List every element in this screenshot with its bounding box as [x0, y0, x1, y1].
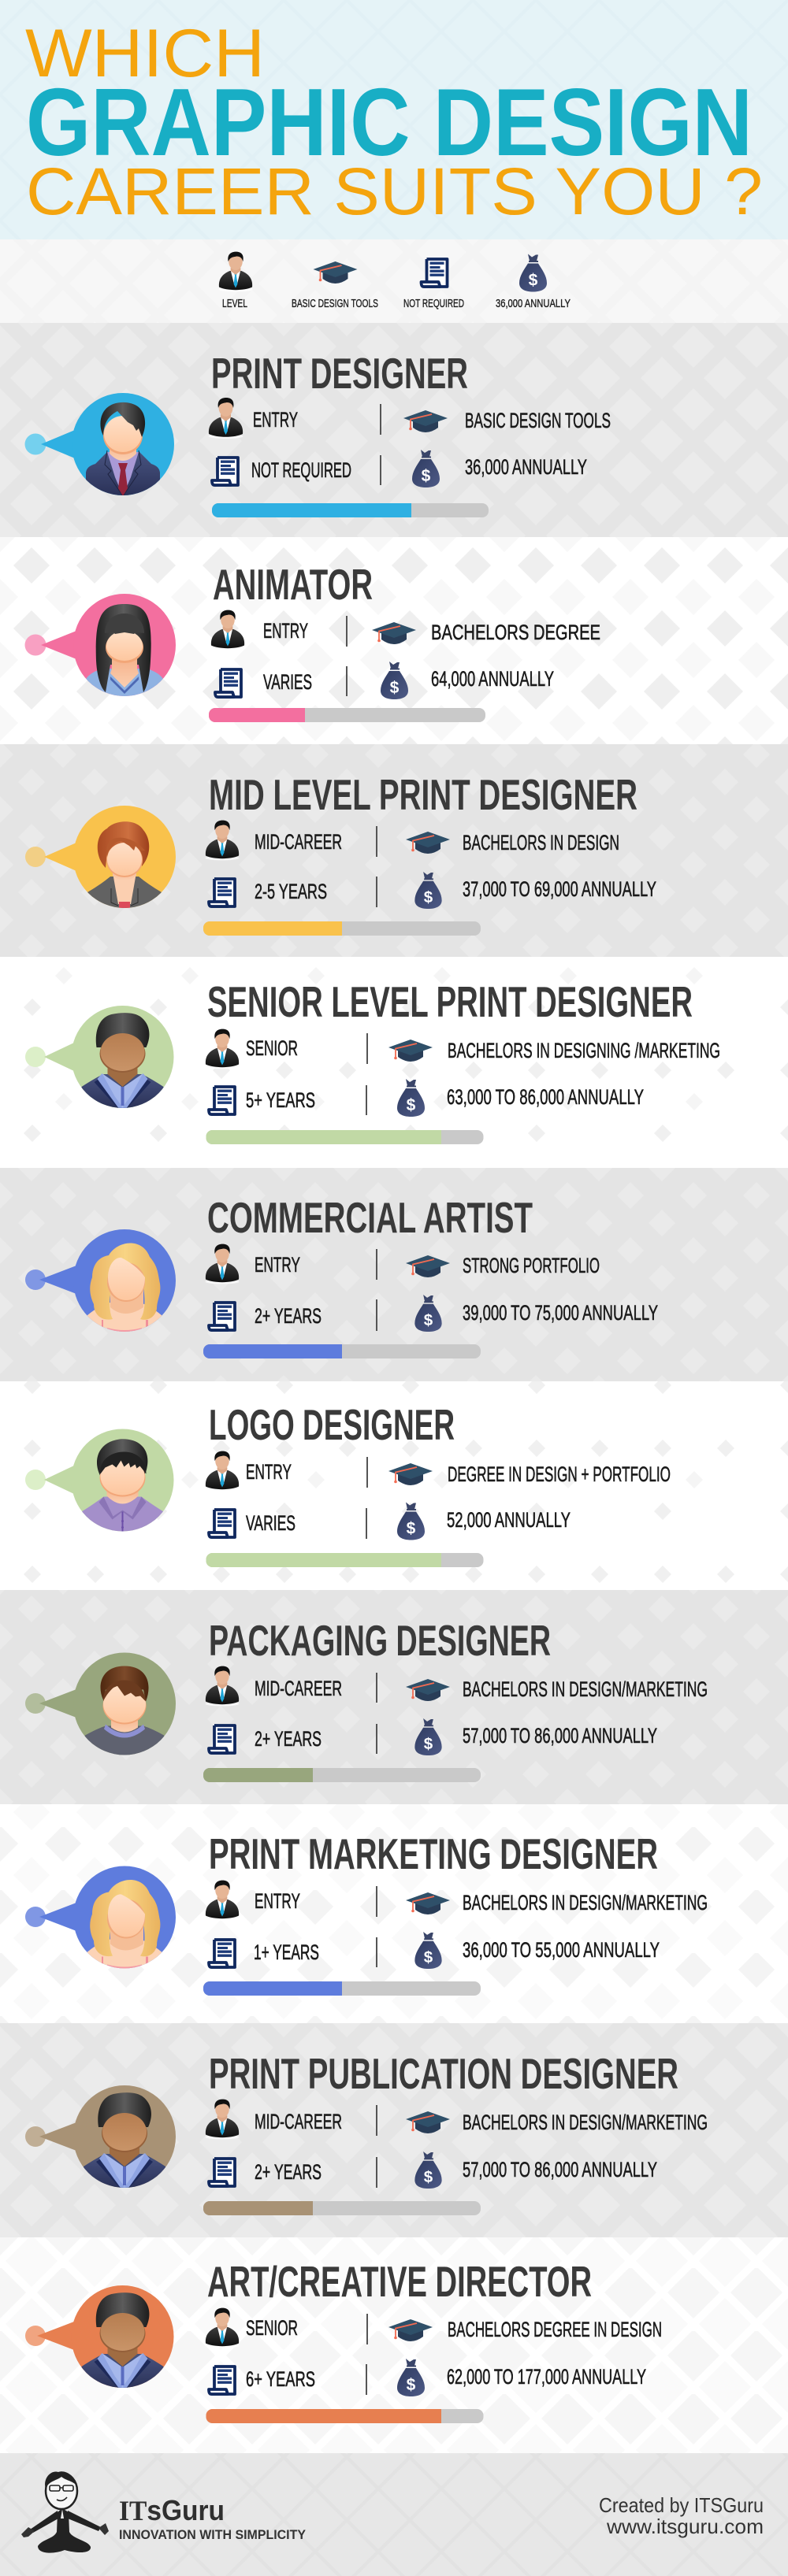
credit	[599, 2493, 764, 2538]
level	[205, 2308, 298, 2348]
salary: 63,000 TO 86,000 ANNUALLY	[447, 1085, 644, 1109]
salary: 52,000 ANNUALLY	[447, 1508, 571, 1532]
salary: 64,000 ANNUALLY	[431, 667, 554, 691]
level: ENTRY	[263, 619, 308, 643]
experience: 2+ YEARS	[255, 1727, 322, 1751]
progress bar	[203, 1768, 481, 1782]
legend item: experience: NOT REQUIRED	[403, 297, 464, 310]
level	[205, 1244, 300, 1284]
legend item: salary	[496, 254, 571, 310]
progress bar	[203, 1344, 481, 1358]
salary	[376, 2152, 657, 2189]
level: ENTRY	[246, 1460, 292, 1484]
level: SENIOR	[246, 2316, 298, 2340]
experience: 1+ YEARS	[254, 1940, 319, 1964]
salary	[376, 1295, 658, 1332]
header panel	[0, 0, 788, 239]
level	[205, 1451, 292, 1491]
progress bar	[206, 1553, 484, 1567]
experience	[209, 2367, 315, 2394]
experience: 2-5 YEARS	[255, 880, 327, 903]
experience: 6+ YEARS	[246, 2367, 315, 2391]
avatar bubble	[25, 2085, 176, 2193]
level	[205, 821, 342, 860]
education: BACHELORS IN DESIGN	[463, 831, 619, 854]
salary	[366, 1079, 644, 1117]
panel: mid level print designer	[0, 744, 788, 957]
legend item: education	[292, 261, 378, 310]
experience	[209, 1510, 296, 1537]
title: WHICH	[25, 16, 265, 91]
credit: Created by ITSGuru	[599, 2493, 764, 2517]
salary	[366, 2359, 646, 2396]
tagline: INNOVATION WITH SIMPLICITY	[119, 2527, 307, 2542]
education: BACHELORS DEGREE IN DESIGN	[448, 2318, 662, 2341]
title	[25, 16, 763, 228]
level: ENTRY	[253, 408, 298, 432]
education	[376, 826, 619, 857]
education: BASIC DESIGN TOOLS	[465, 409, 611, 432]
experience	[209, 1725, 322, 1753]
level	[210, 610, 308, 650]
salary: 36,000 ANNUALLY	[465, 455, 587, 479]
heading: ART/CREATIVE DIRECTOR	[207, 2257, 592, 2306]
education	[380, 404, 611, 435]
avatar bubble	[25, 1429, 173, 1533]
panel: legend	[0, 239, 788, 323]
education: STRONG PORTFOLIO	[463, 1254, 600, 1277]
progress bar	[203, 2201, 481, 2215]
heading: PACKAGING DESIGNER	[209, 1616, 551, 1665]
level: MID-CAREER	[255, 2110, 342, 2133]
level: ENTRY	[255, 1889, 300, 1913]
salary: 57,000 TO 86,000 ANNUALLY	[463, 1724, 657, 1748]
experience	[209, 1940, 319, 1967]
panel: print designer	[0, 323, 788, 537]
salary	[380, 450, 587, 487]
experience: 2+ YEARS	[255, 1304, 322, 1328]
level: SENIOR	[246, 1036, 298, 1060]
avatar bubble	[25, 806, 176, 909]
avatar bubble	[25, 393, 174, 496]
credit: www.itsguru.com	[606, 2515, 764, 2538]
progress bar	[206, 1130, 484, 1144]
progress bar	[206, 2409, 484, 2423]
level: ENTRY	[255, 1253, 300, 1277]
education	[366, 1033, 720, 1064]
education	[346, 616, 600, 647]
salary	[376, 872, 656, 909]
education	[376, 1886, 708, 1917]
progress bar	[209, 708, 485, 722]
salary	[366, 1503, 571, 1540]
panel: animator	[0, 537, 788, 744]
level	[208, 398, 298, 439]
education	[376, 2105, 708, 2136]
heading: PRINT DESIGNER	[211, 349, 468, 398]
level	[205, 1881, 300, 1920]
panel: print publication designer	[0, 2023, 788, 2237]
experience: VARIES	[263, 670, 312, 694]
experience	[209, 879, 327, 906]
salary: 36,000 TO 55,000 ANNUALLY	[463, 1938, 660, 1962]
panel: art/creative director	[0, 2237, 788, 2453]
avatar bubble	[25, 1652, 176, 1756]
title: CAREER SUITS YOU ?	[26, 154, 763, 228]
heading: LOGO DESIGNER	[209, 1400, 455, 1449]
level: MID-CAREER	[255, 1677, 342, 1700]
avatar bubble	[25, 2285, 173, 2393]
salary: 39,000 TO 75,000 ANNUALLY	[463, 1301, 658, 1325]
education: BACHELORS DEGREE	[431, 621, 600, 644]
panel: packaging designer	[0, 1590, 788, 1804]
legend item: level: LEVEL	[222, 297, 247, 310]
education	[376, 1673, 708, 1703]
panel: commercial artist	[0, 1168, 788, 1381]
progress bar	[203, 921, 481, 936]
level	[205, 1029, 298, 1069]
salary: 57,000 TO 86,000 ANNUALLY	[463, 2158, 657, 2181]
salary: 37,000 TO 69,000 ANNUALLY	[463, 877, 656, 901]
experience	[209, 1303, 322, 1330]
brand name: ITsGuru	[119, 2494, 225, 2526]
experience	[209, 1087, 315, 1114]
education	[376, 1249, 600, 1280]
progress bar	[203, 1981, 481, 1996]
avatar bubble	[25, 1229, 176, 1332]
level: MID-CAREER	[255, 830, 342, 854]
salary	[376, 1718, 657, 1755]
experience	[215, 669, 312, 697]
panel: logo designer	[0, 1381, 788, 1590]
education	[366, 1457, 671, 1488]
mascot logo	[21, 2471, 109, 2553]
legend item: experience	[403, 259, 464, 310]
progress bar	[212, 503, 489, 517]
avatar bubble	[25, 1006, 173, 1114]
footer panel	[0, 2453, 788, 2576]
panel: print marketing designer	[0, 1804, 788, 2023]
level	[205, 1666, 342, 1706]
experience	[212, 458, 351, 485]
experience: 2+ YEARS	[255, 2160, 322, 2184]
avatar bubble	[25, 1866, 176, 1969]
salary: 62,000 TO 177,000 ANNUALLY	[447, 2365, 646, 2389]
salary	[346, 662, 554, 699]
education	[366, 2314, 662, 2344]
legend item: salary: 36,000 ANNUALLY	[496, 297, 571, 310]
panel: senior level print designer	[0, 957, 788, 1168]
experience	[209, 2159, 322, 2186]
level	[205, 2100, 342, 2139]
salary	[376, 1932, 660, 1969]
legend item: education: BASIC DESIGN TOOLS	[292, 297, 378, 310]
experience: VARIES	[246, 1511, 296, 1535]
avatar bubble	[25, 594, 176, 697]
experience: NOT REQUIRED	[251, 458, 351, 482]
heading: COMMERCIAL ARTIST	[207, 1193, 533, 1242]
legend item: level	[218, 252, 253, 310]
experience: 5+ YEARS	[246, 1088, 315, 1112]
heading: ANIMATOR	[213, 560, 373, 609]
